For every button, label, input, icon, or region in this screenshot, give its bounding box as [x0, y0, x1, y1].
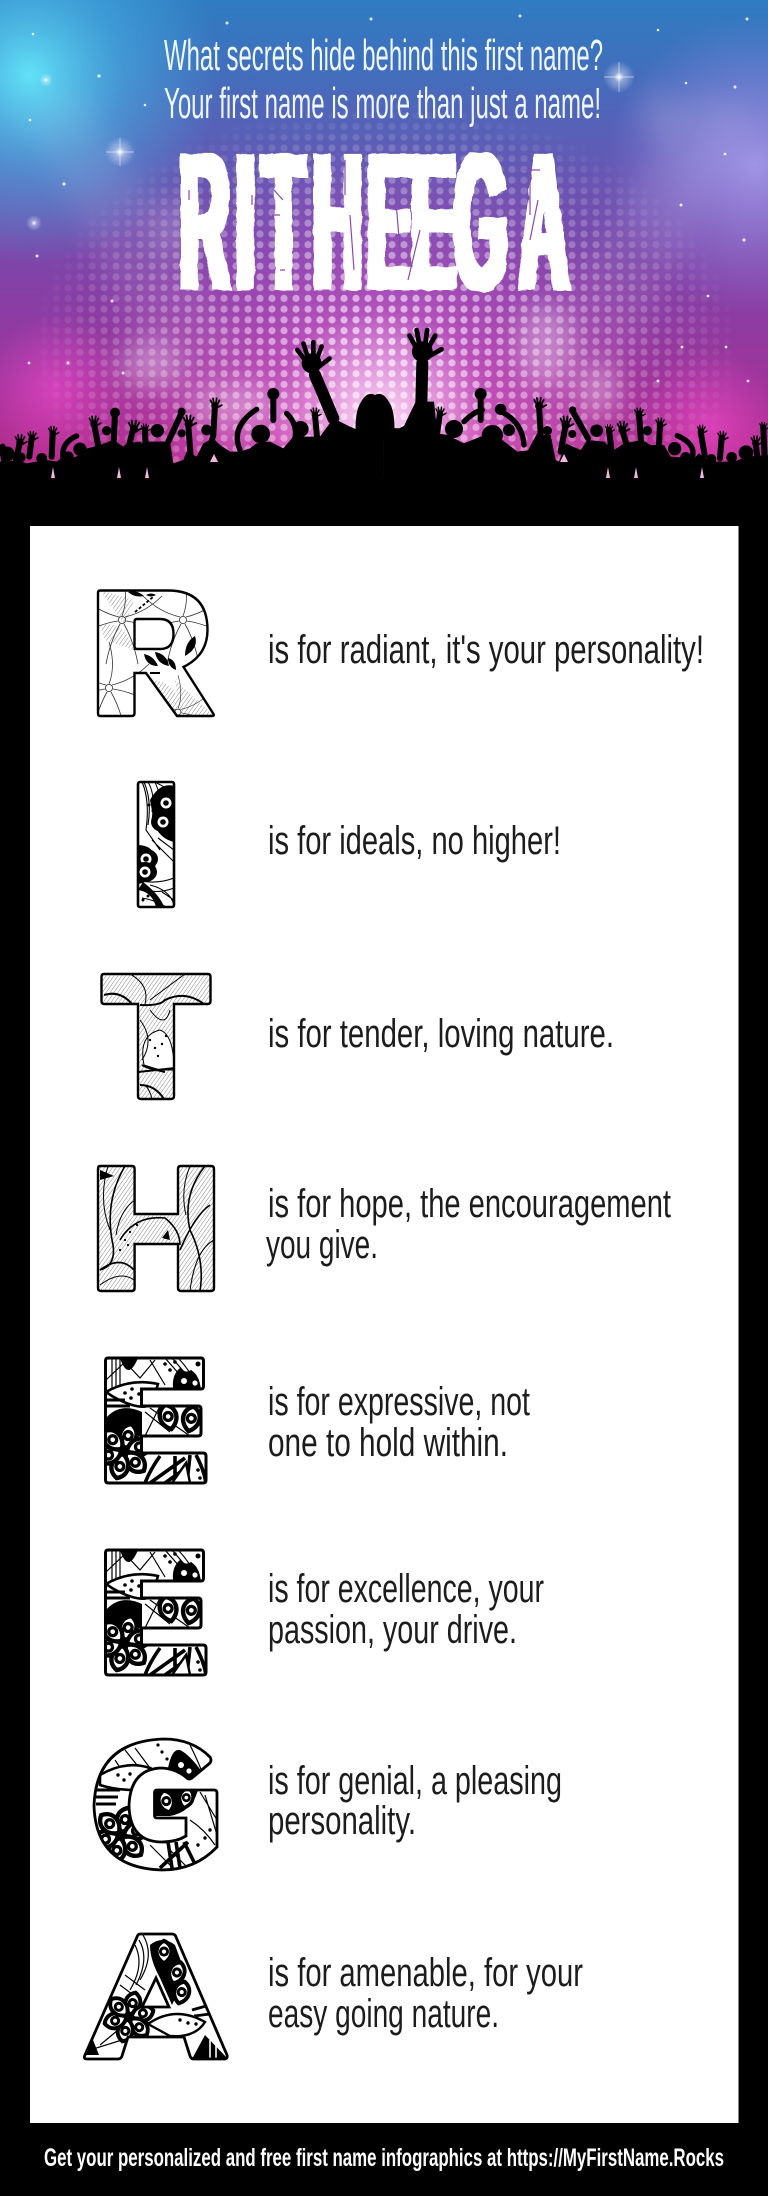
left crowd [0, 340, 384, 490]
icon: zentangle letter I [136, 780, 176, 908]
text: A meaning: is for amenable, for your [268, 1951, 583, 1995]
second letter E row [95, 1550, 544, 1675]
letter A row: easy going nature. [268, 1992, 499, 2036]
stars and sparkles [26, 14, 749, 382]
letter H row: you give. [266, 1223, 378, 1267]
heading: tagline [164, 31, 603, 128]
icon: zentangle letter R [96, 589, 215, 718]
text: E meaning: is for expressive, not [268, 1380, 530, 1424]
icon: zentangle letter G [92, 1739, 217, 1870]
letter T row [100, 972, 614, 1100]
text: G meaning: is for genial, a pleasing [268, 1759, 562, 1803]
letter I row [133, 782, 561, 907]
letter A row [84, 1934, 583, 2059]
second letter E row: passion, your drive. [268, 1608, 517, 1652]
right crowd [384, 330, 768, 490]
icon: zentangle letter T [100, 972, 212, 1100]
icon: zentangle letter A [84, 1934, 228, 2059]
letter G row: personality. [268, 1799, 416, 1843]
letter H row [96, 1164, 671, 1294]
title: name: RITHEEGA [180, 113, 568, 330]
icon: zentangle letter H [96, 1164, 216, 1294]
letter E row [95, 1358, 530, 1483]
letter R row [96, 589, 702, 718]
panel: letter meanings [30, 526, 738, 2123]
crowd silhouette [0, 330, 768, 526]
icon: zentangle letter E [95, 1358, 206, 1483]
concert background panel [0, 0, 768, 526]
letter G row [92, 1739, 562, 1870]
icon: zentangle letter E, second [95, 1550, 206, 1675]
text: I meaning: is for ideals, no higher! [268, 819, 561, 863]
main figure head [356, 394, 394, 440]
text: T meaning: is for tender, loving nature. [268, 1012, 614, 1056]
text: second E meaning: is for excellence, your [268, 1567, 544, 1611]
letter E row: one to hold within. [268, 1421, 508, 1465]
